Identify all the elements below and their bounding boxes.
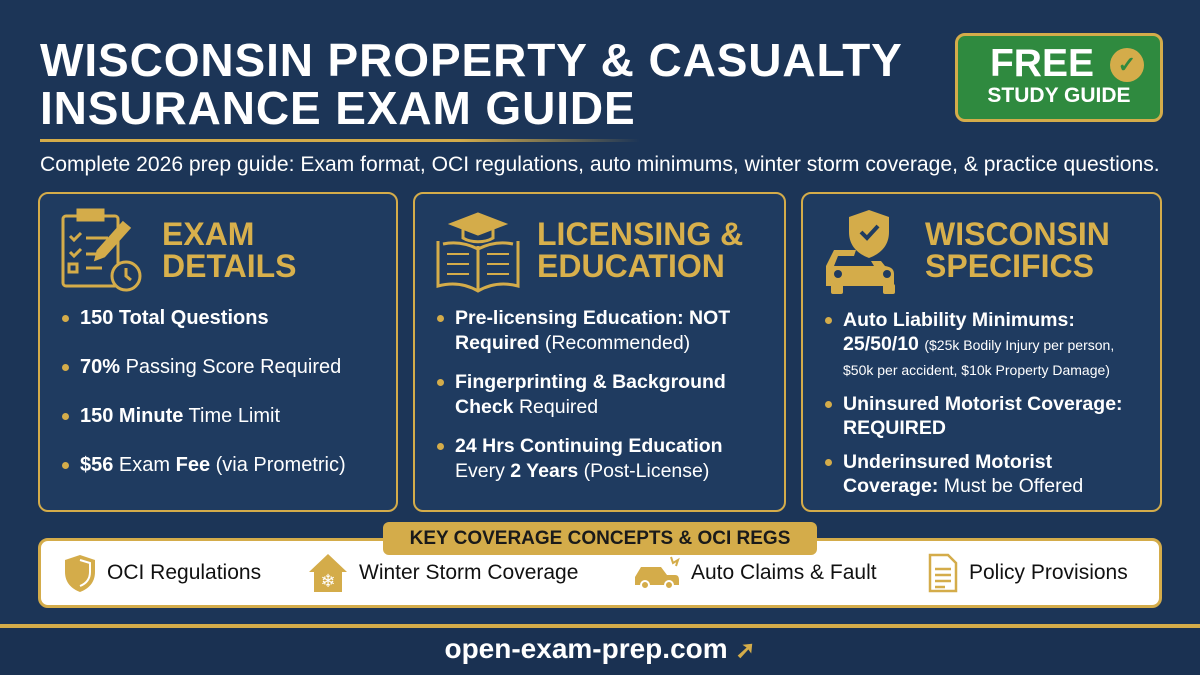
label tab: key coverage — [383, 522, 817, 555]
heading: LICENSING & — [537, 216, 743, 252]
bullets: 150 Minute Time Limit — [80, 405, 280, 427]
item: winter storm: ❄ — [320, 571, 336, 591]
title: WISCONSIN PROPERTY & CASUALTY — [40, 34, 903, 86]
heading: SPECIFICS — [925, 248, 1094, 284]
bullets: Uninsured Motorist Coverage: — [843, 393, 1123, 415]
bullets: Auto Liability Minimums: — [843, 309, 1075, 331]
bullets — [825, 309, 1123, 497]
icon: clipboard — [62, 208, 142, 292]
bullets — [62, 307, 346, 476]
item: auto claims: Auto Claims & Fault — [691, 561, 877, 584]
bullets: $56 Exam Fee (via Prometric) — [80, 454, 346, 476]
item: winter storm: Winter Storm Coverage — [359, 561, 578, 584]
title: INSURANCE EXAM GUIDE — [40, 82, 636, 134]
bullets: Required (Recommended) — [455, 332, 690, 354]
heading — [925, 216, 1110, 284]
panel: licensing — [413, 192, 786, 512]
bullets: Coverage: Must be Offered — [843, 475, 1083, 497]
bullets: Fingerprinting & Background — [455, 371, 726, 393]
icon: check badge: ✓ — [1118, 52, 1136, 77]
bullets — [437, 307, 730, 482]
heading: WISCONSIN — [925, 216, 1110, 252]
item: winter storm — [309, 554, 578, 592]
icon: car with shield — [826, 210, 895, 294]
panel: key coverage concepts — [38, 538, 1162, 608]
item: OCI regulations — [65, 555, 261, 592]
heading: EXAM — [162, 216, 254, 252]
icon: check badge — [1110, 48, 1144, 82]
title underline — [40, 139, 640, 142]
heading: EDUCATION — [537, 248, 725, 284]
label tab: key coverage: KEY COVERAGE CONCEPTS & OCI REGS — [410, 528, 790, 549]
bullets: Check Required — [455, 396, 598, 418]
gold divider — [0, 624, 1200, 628]
panel: exam details — [38, 192, 398, 512]
footer url: open-exam-prep.com ➚ — [444, 633, 756, 664]
bullets: 25/50/10 ($25k Bodily Injury per person, — [843, 333, 1114, 355]
bullets: REQUIRED — [843, 417, 946, 439]
badge: free study guide: STUDY GUIDE — [987, 84, 1131, 107]
bullets: Underinsured Motorist — [843, 451, 1052, 473]
footer — [0, 628, 1200, 675]
badge: free study guide — [955, 33, 1163, 122]
panel: wisconsin specifics — [801, 192, 1162, 512]
item: policy provisions — [928, 554, 1128, 592]
subtitle: Complete 2026 prep guide: Exam format, OCI regulations, auto minimums, winter storm coverage, & practice questions. — [40, 153, 1160, 176]
title — [40, 34, 903, 134]
bullets: Every 2 Years (Post-License) — [455, 460, 709, 482]
bullets: 150 Total Questions — [80, 307, 269, 329]
badge: free study guide: FREE — [990, 42, 1094, 85]
bullets: Pre-licensing Education: NOT — [455, 307, 730, 329]
bullets: 24 Hrs Continuing Education — [455, 435, 723, 457]
heading — [162, 216, 297, 284]
item: OCI regulations: OCI Regulations — [107, 561, 261, 584]
item: policy provisions: Policy Provisions — [969, 561, 1128, 584]
bullets: $50k per accident, $10k Property Damage) — [843, 362, 1110, 378]
heading — [537, 216, 743, 284]
icon: book with cap — [436, 212, 520, 293]
heading: DETAILS — [162, 248, 297, 284]
bullets: 70% Passing Score Required — [80, 356, 341, 378]
item: auto claims — [635, 556, 877, 588]
